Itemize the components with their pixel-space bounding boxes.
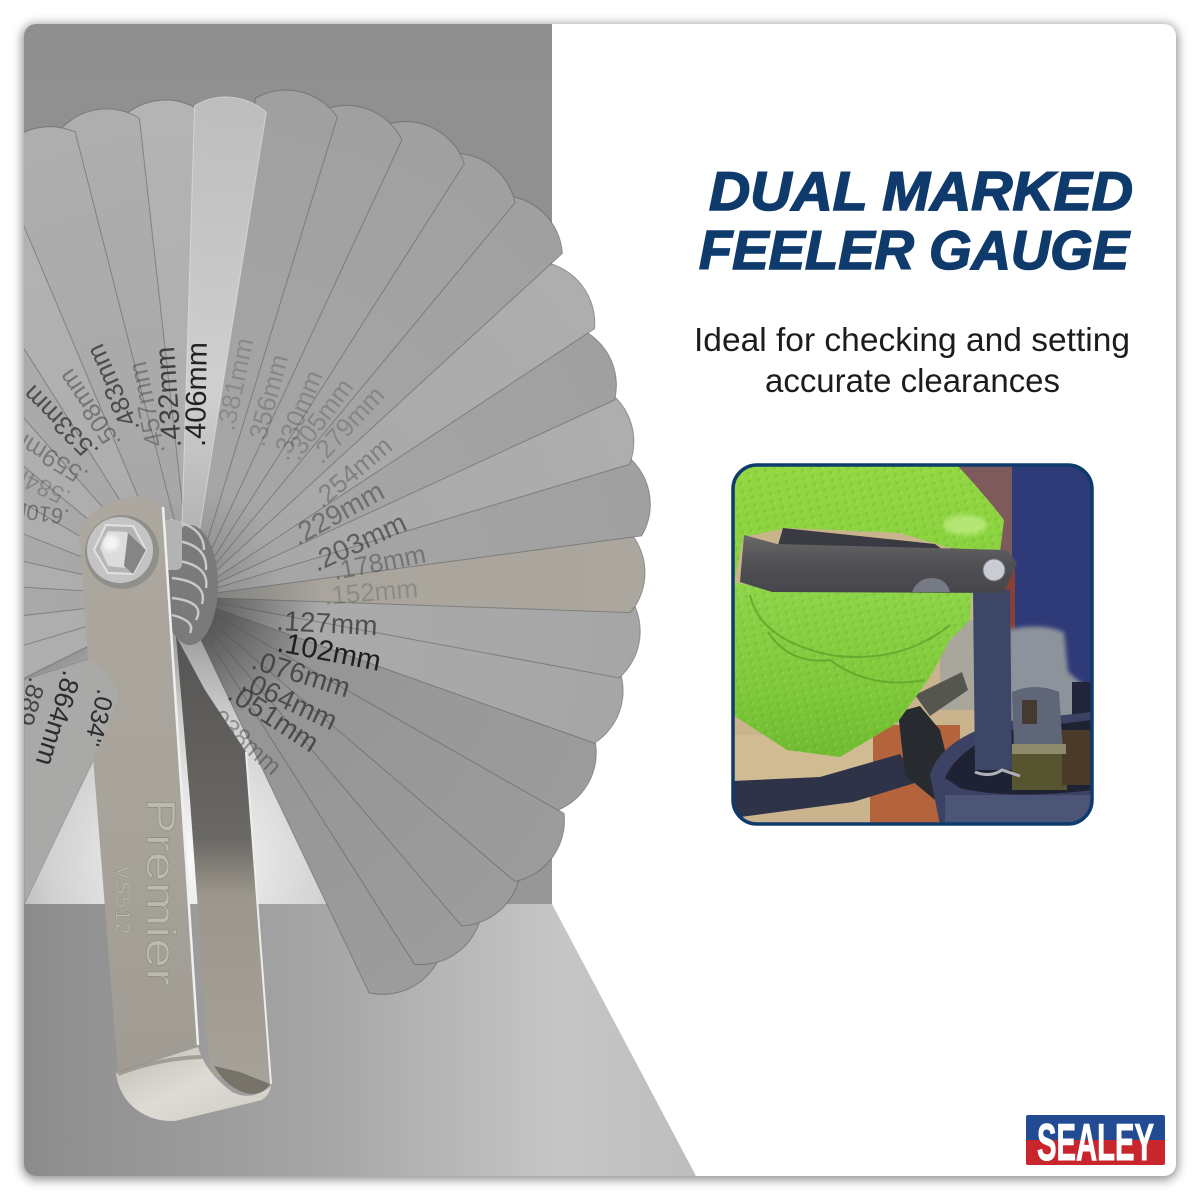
blade thickness markings: .483mm — [80, 340, 145, 438]
blade thickness markings: .330mm — [266, 366, 329, 464]
nut — [915, 672, 968, 716]
icon: gauge screw — [983, 559, 1005, 581]
inset photo of gauge in use — [733, 465, 1093, 825]
blade thickness markings: .406mm — [180, 342, 214, 447]
bracket — [899, 706, 946, 800]
handle edge highlight — [246, 752, 271, 1084]
blade thickness markings: .102mm — [275, 626, 384, 678]
blade thickness markings: .533mm — [17, 379, 104, 467]
glove lower texture — [733, 582, 972, 757]
handle engraved brand: Premier — [138, 798, 184, 986]
gauge handle notch — [912, 578, 950, 592]
blade thickness markings: .178mm — [330, 539, 428, 586]
lower blades — [200, 598, 641, 995]
handle folded end — [116, 1047, 271, 1121]
handle fold inner shadow — [214, 1066, 270, 1094]
blade thickness markings: .038mm — [201, 700, 287, 781]
thickest blade with imperial and metric marks: .034" — [78, 687, 119, 749]
feeler gauge fan of blades — [0, 82, 658, 1007]
blade thickness markings: .152mm — [323, 573, 419, 611]
upper and right blades — [0, 82, 658, 632]
blade thickness markings: .076mm — [248, 644, 354, 703]
panel: studio backdrop floor — [24, 904, 696, 1176]
glove highlight — [943, 515, 987, 535]
wire and terminal — [975, 770, 1020, 776]
glove lower fingers — [733, 582, 972, 757]
glove creases — [750, 595, 950, 682]
blade thickness markings — [0, 335, 428, 781]
photo background — [733, 465, 1093, 825]
handle fold crease — [118, 1057, 202, 1074]
gauge handle back leaf — [778, 528, 941, 548]
subheading: accurate clearances — [765, 363, 1060, 400]
blade thickness markings: .051mm — [223, 677, 324, 758]
blade thickness markings: .305mm — [279, 373, 359, 466]
glove upper finger — [733, 465, 1004, 590]
blade thickness markings: .457mm — [122, 359, 171, 457]
blade thickness markings: .203mm — [306, 507, 411, 577]
blade thickness markings: .279mm — [304, 380, 390, 469]
photo border — [733, 465, 1092, 824]
glove upper texture — [735, 467, 1002, 578]
blade thickness markings: .254mm — [307, 430, 398, 514]
handle engraved model number: VS512 — [111, 866, 133, 934]
pivot spring stack — [160, 520, 218, 645]
blade thickness markings: .356mm — [241, 351, 294, 450]
blade thickness markings: .064mm — [237, 665, 342, 736]
gauge feeler blade — [973, 590, 1012, 770]
folded steel handle back leaf — [176, 636, 272, 1084]
blade thickness markings: .381mm — [211, 335, 259, 433]
thickest blade with imperial and metric marks: .889 — [10, 674, 51, 729]
panel: studio backdrop wall — [24, 24, 552, 904]
carburettor bowl — [930, 687, 1092, 825]
subheading: Ideal for checking and setting — [694, 322, 1130, 359]
thickest blade with imperial and metric marks: .864mm — [30, 667, 87, 769]
blade thickness markings: .559mm — [1, 420, 93, 491]
blade thickness markings: .229mm — [286, 475, 389, 551]
blade thickness markings: .508mm — [53, 364, 127, 454]
heading — [699, 171, 1132, 270]
heading: DUAL MARKED — [709, 160, 1133, 222]
blade thickness markings: .127mm — [276, 605, 378, 641]
blade thickness markings: .432mm — [149, 346, 187, 449]
thickest blade with imperial and metric marks — [24, 659, 119, 904]
subheading — [697, 327, 1128, 392]
hose — [733, 754, 918, 818]
left blades — [24, 227, 138, 679]
handle front leaf — [79, 496, 198, 1072]
handle front leaf white edge — [163, 507, 198, 1045]
gauge handle — [740, 535, 1017, 593]
icon: hex bolt — [85, 515, 159, 589]
heading: FEELER GAUGE — [699, 219, 1131, 281]
